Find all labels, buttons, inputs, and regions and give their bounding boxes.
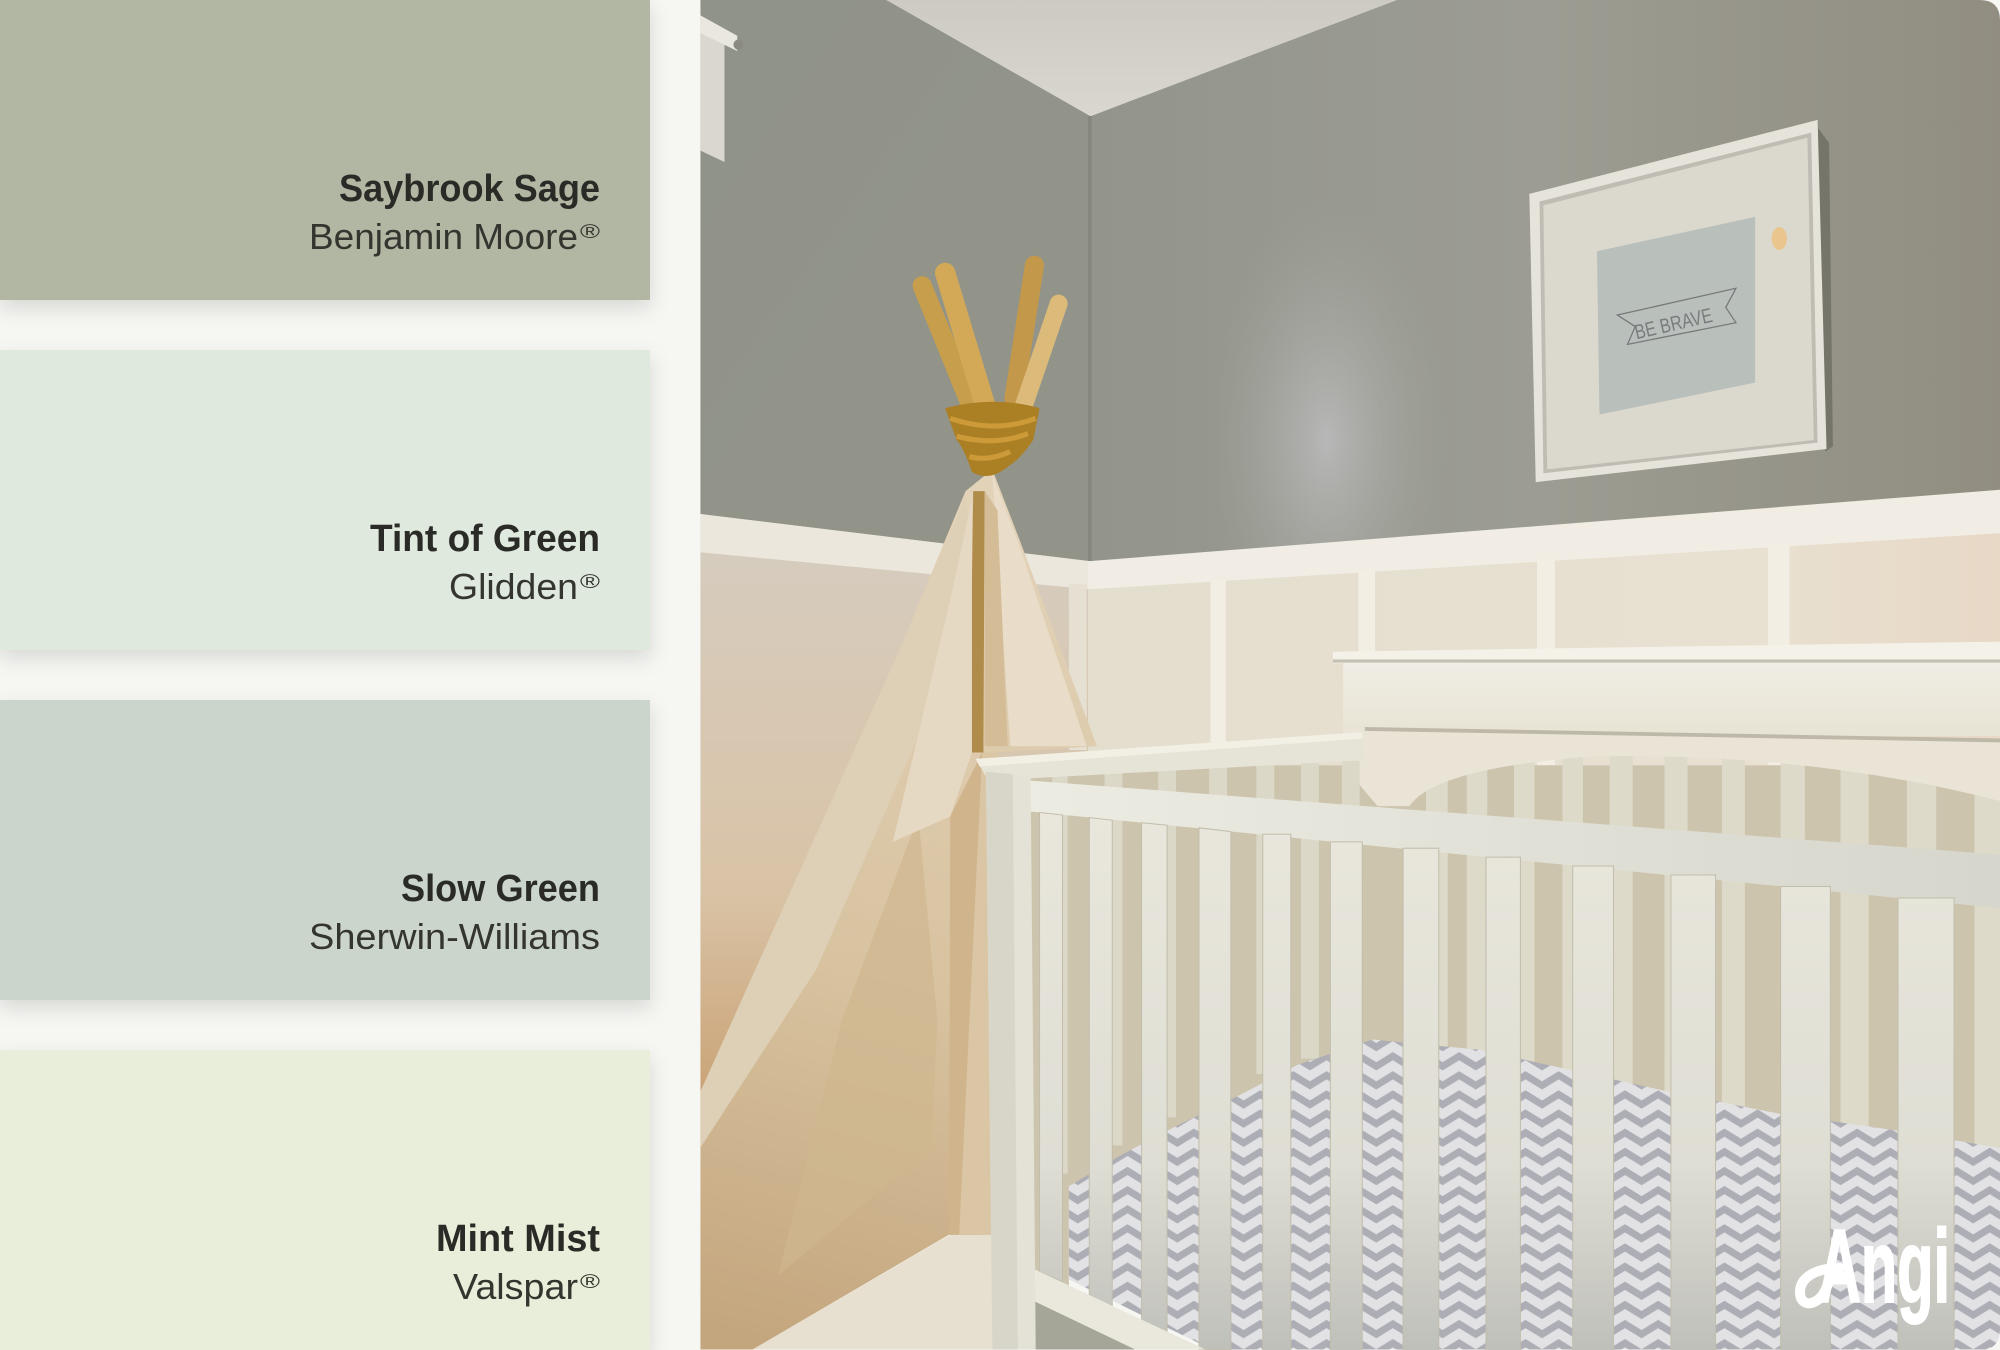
swatch: Saybrook Sage: Saybrook Sage — [339, 168, 600, 210]
ceiling — [886, 0, 1397, 116]
left wall — [700, 0, 1091, 568]
swatch: Saybrook Sage: ® — [580, 222, 600, 243]
left wainscot — [700, 514, 1091, 1148]
swatch: Mint Mist: ® — [580, 1272, 600, 1293]
bottom rail — [1035, 1270, 1205, 1350]
right wall — [1088, 0, 2000, 561]
mattress with chevron sheet — [1069, 1040, 2000, 1349]
headboard — [1333, 642, 2000, 806]
crib back and side interior — [1031, 765, 2000, 1301]
swatch: Tint of Green: Glidden — [449, 566, 578, 607]
front slats — [1040, 812, 1954, 1350]
tipi fabric — [700, 469, 1097, 1349]
side rail and side slats — [976, 732, 1365, 1173]
under crib shadow — [1035, 1302, 1135, 1350]
banner: BE BRAVE — [1633, 305, 1715, 344]
swatch: Mint Mist: Mint Mist — [436, 1218, 600, 1260]
framed print — [1529, 120, 1833, 482]
swatch: Tint of Green — [0, 350, 650, 650]
logo: Angi — [1800, 1209, 1950, 1325]
tipi rope — [945, 402, 1040, 476]
art print — [1597, 217, 1755, 415]
floor rug — [753, 1235, 992, 1350]
tipi poles — [922, 265, 1059, 408]
back slats — [1426, 753, 2000, 1157]
swatch: Saybrook Sage — [0, 0, 650, 300]
swatch: Slow Green: Slow Green — [401, 868, 600, 910]
corner post — [986, 772, 1036, 1349]
panel: color swatches — [0, 0, 650, 1350]
photo: nursery room with tipi and crib — [700, 0, 2000, 1350]
swatch: Slow Green — [0, 700, 650, 1000]
banner — [1617, 288, 1736, 344]
swatch: Tint of Green: Tint of Green — [370, 518, 600, 560]
window shade — [700, 15, 744, 162]
swatch: Tint of Green: ® — [580, 572, 600, 593]
swatch: Mint Mist — [0, 1050, 650, 1350]
swatch: Mint Mist: Valspar — [453, 1266, 578, 1307]
front rail — [1014, 779, 2000, 908]
swatch: Slow Green: Sherwin-Williams — [309, 916, 600, 957]
right wainscot — [1088, 490, 2000, 765]
swatch: Saybrook Sage: Benjamin Moore — [309, 216, 578, 257]
